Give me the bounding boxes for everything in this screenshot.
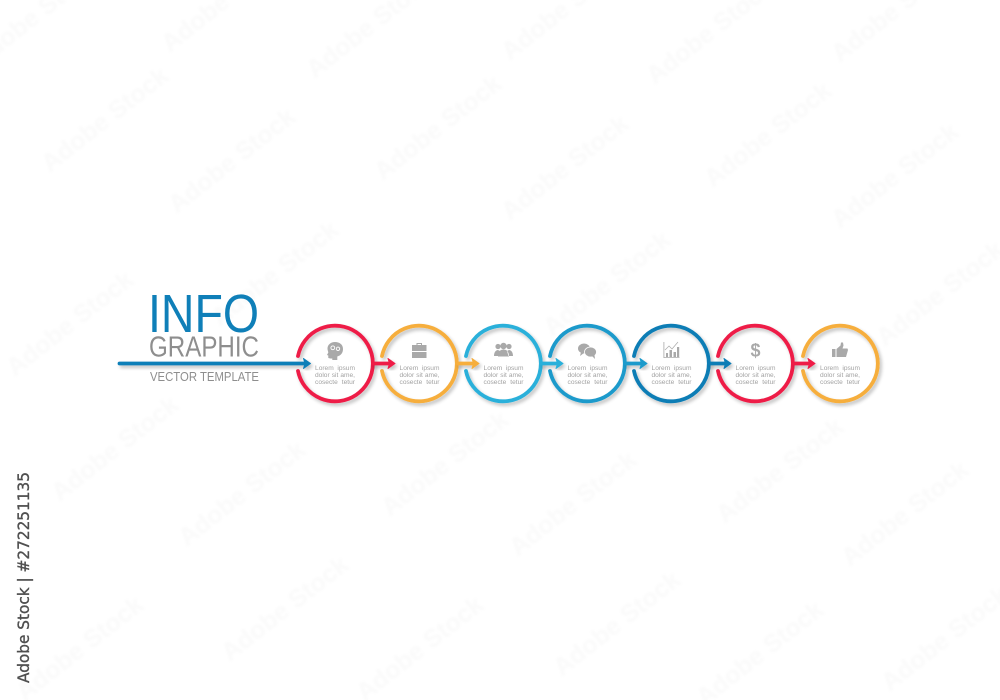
icon: briefcase — [412, 343, 426, 358]
step text: Lorem ipsum — [484, 365, 524, 372]
step text: Lorem ipsum — [652, 365, 692, 372]
icon: bar chart — [664, 342, 680, 358]
step text — [315, 365, 356, 386]
step text — [400, 365, 440, 386]
step text: dolor sit ame, — [652, 372, 692, 379]
step text: cosecte tetur — [315, 379, 356, 386]
watermark pattern: Adobe Stock — [376, 406, 514, 522]
icon: speech bubbles — [578, 344, 596, 359]
step text: Lorem ipsum — [400, 365, 440, 372]
title: GRAPHIC: GRAPHIC — [149, 332, 259, 364]
arrow: step 5 to 6 — [710, 358, 731, 368]
icon: thumbs up — [832, 342, 848, 357]
step text: cosecte tetur — [484, 379, 524, 386]
step text: cosecte tetur — [400, 379, 440, 386]
watermark pattern: Adobe Stock — [369, 70, 507, 186]
watermark pattern: Adobe Stock — [496, 110, 634, 226]
watermark pattern: Adobe Stock — [163, 103, 301, 219]
watermark pattern: Adobe Stock — [46, 391, 184, 507]
step text — [568, 365, 608, 386]
watermark pattern: Adobe Stock — [504, 446, 642, 562]
step text: Lorem ipsum — [315, 365, 355, 372]
arrow: title into step 1 — [120, 358, 310, 368]
icon: head with gears — [327, 342, 343, 360]
watermark pattern: Adobe Stock — [216, 551, 354, 667]
step text — [484, 365, 524, 386]
step text: cosecte tetur — [736, 379, 776, 386]
watermark pattern: Adobe Stock — [836, 456, 974, 572]
watermark pattern: Adobe Stock — [538, 226, 676, 342]
step text: Lorem ipsum — [736, 365, 776, 372]
step text: dolor sit ame, — [568, 372, 608, 379]
step text: dolor sit ame, — [736, 372, 776, 379]
subtitle: vector template: VECTOR TEMPLATE — [150, 369, 259, 384]
step text: cosecte tetur — [568, 379, 608, 386]
arrow: step 2 to 3 — [458, 358, 479, 368]
step 2: orange circle, briefcase icon — [382, 326, 457, 401]
arrow: step 4 to 5 — [626, 358, 647, 368]
watermark pattern: Adobe Stock — [548, 566, 686, 682]
watermark pattern: Adobe Stock — [826, 118, 964, 234]
step text: cosecte tetur — [652, 379, 692, 386]
watermark pattern: Adobe Stock — [206, 216, 344, 332]
watermark pattern: Adobe Stock — [699, 77, 837, 193]
arrow: step 6 to 7 — [794, 358, 815, 368]
stock id label: Adobe Stock | #272251135 — [14, 472, 33, 683]
step 5: dark blue circle, chart icon — [634, 326, 709, 401]
watermark pattern: Adobe Stock — [711, 413, 849, 529]
step 3: light blue circle, people icon — [466, 326, 541, 401]
step 7: orange circle, thumbs up icon — [803, 326, 878, 401]
step 1: red circle, head icon — [298, 326, 373, 401]
step 4: mid blue circle, speech bubbles icon — [550, 326, 625, 401]
step text — [652, 365, 692, 386]
step text: dolor sit ame, — [315, 372, 355, 379]
title: INFO: INFO — [148, 285, 259, 344]
step text: dolor sit ame, — [484, 372, 524, 379]
watermark pattern: Adobe Stock — [36, 62, 174, 178]
icon: dollar: $ — [750, 340, 761, 360]
step text — [820, 365, 861, 386]
icon: people — [494, 343, 513, 356]
watermark pattern: Adobe Stock — [1, 266, 139, 382]
step text: cosecte tetur — [820, 379, 861, 386]
arrow: step 1 to 2 — [373, 358, 395, 368]
step text: Lorem ipsum — [820, 365, 860, 372]
watermark pattern: Adobe Stock — [173, 436, 311, 552]
step text: dolor sit ame, — [400, 372, 440, 379]
arrow: step 3 to 4 — [542, 358, 563, 368]
step text: Lorem ipsum — [568, 365, 608, 372]
step text: dolor sit ame, — [820, 372, 860, 379]
step 6: red circle, dollar icon — [718, 326, 793, 401]
step text — [736, 365, 776, 386]
